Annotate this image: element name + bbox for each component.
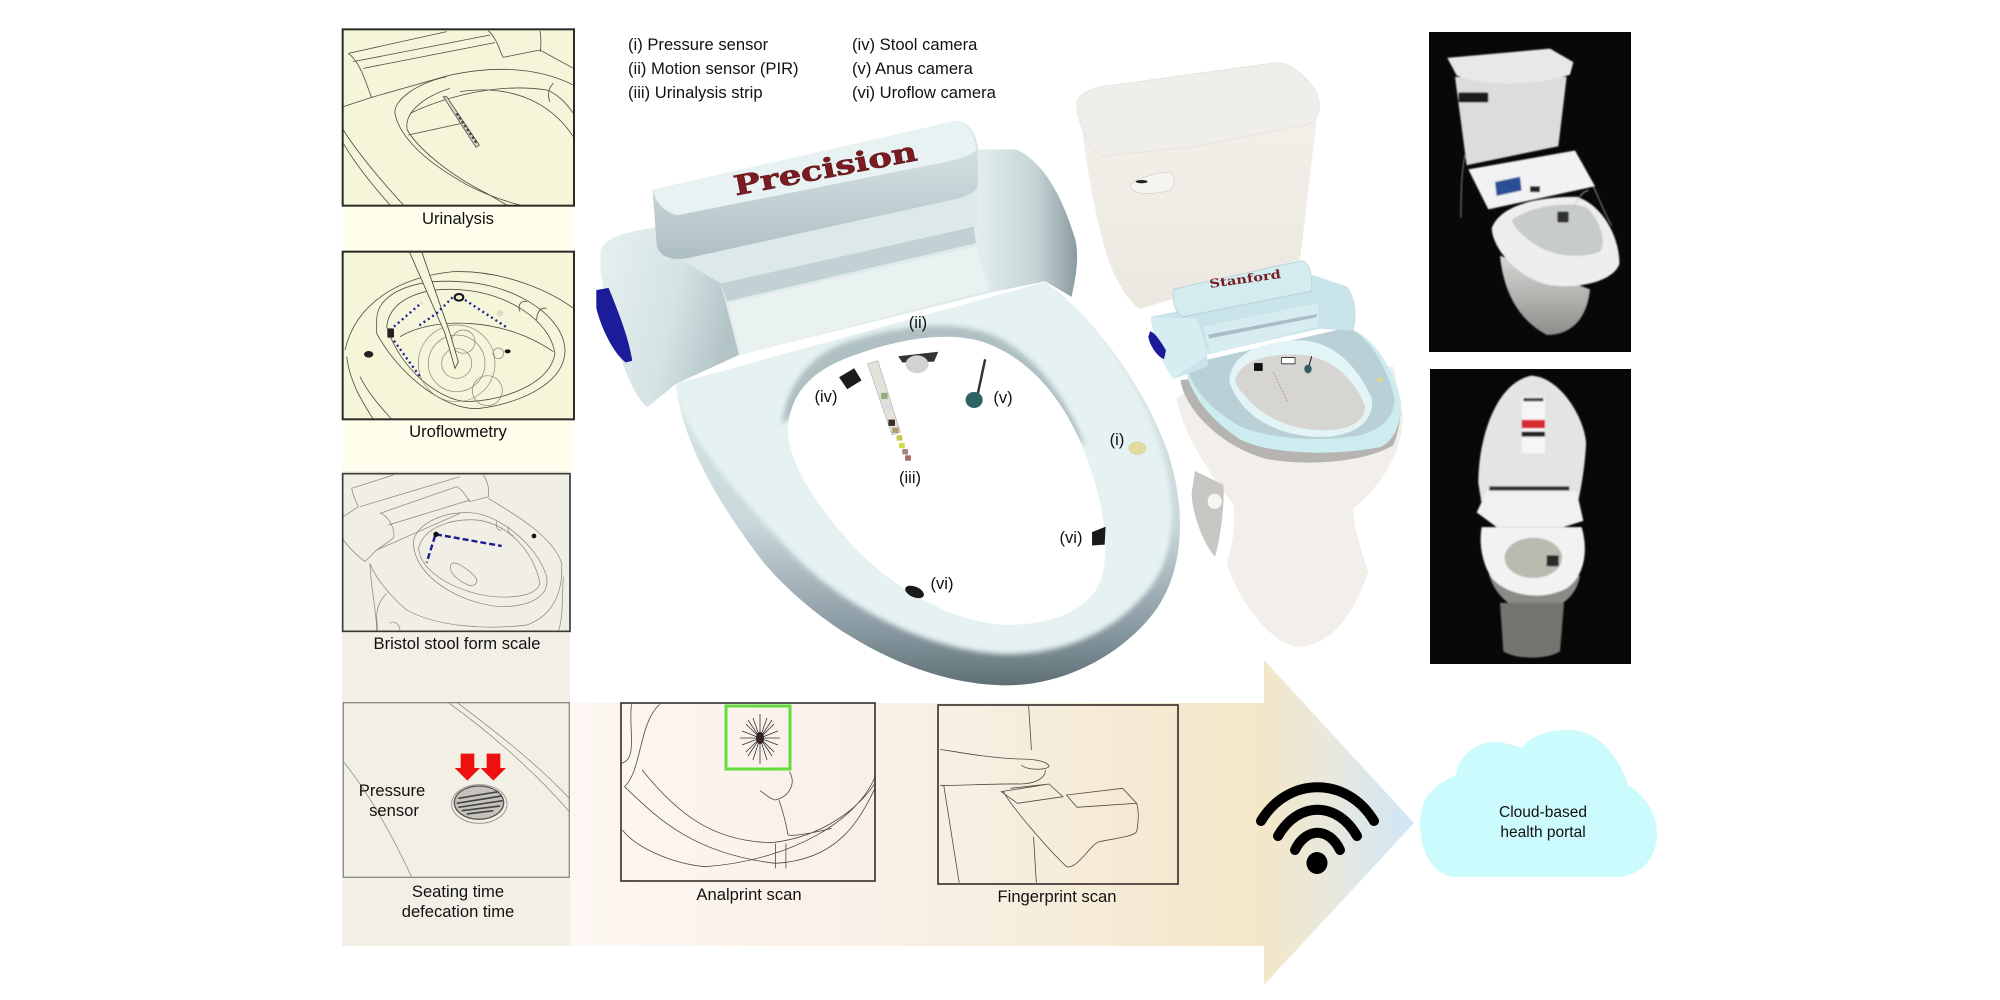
icon: uroflow camera right xyxy=(1092,527,1106,546)
legend left column: (iii) Urinalysis strip xyxy=(628,83,763,102)
pedestal xyxy=(1500,603,1564,658)
arrow to cloud xyxy=(570,660,1414,985)
seat silhouette xyxy=(676,282,1180,685)
flush handle xyxy=(1131,173,1174,194)
bowl rim xyxy=(1492,197,1619,286)
label: analprint: Analprint scan xyxy=(696,885,802,904)
seat top xyxy=(1187,328,1395,439)
bowl skirt xyxy=(1488,571,1580,613)
label: defecation time: defecation time xyxy=(402,902,514,921)
hinge channel xyxy=(721,225,992,355)
bolt cap xyxy=(1207,493,1222,509)
seat xyxy=(1185,327,1401,453)
cloud xyxy=(1420,730,1657,877)
panel: uroflowmetry xyxy=(343,252,574,441)
hinge block xyxy=(1151,275,1356,379)
icon: anus camera stalk xyxy=(978,359,985,394)
seat xyxy=(1481,527,1585,596)
panel frame xyxy=(621,703,875,881)
legend right column: (iv) Stool camera xyxy=(852,35,978,54)
urinalysis strip xyxy=(868,361,911,461)
tank body xyxy=(1082,121,1317,309)
label: ii: (ii) xyxy=(909,313,927,332)
panel: fingerprint scan xyxy=(938,705,1178,906)
hinge front block xyxy=(1151,317,1208,379)
grey seat ring xyxy=(1181,366,1401,463)
electronics xyxy=(1495,177,1522,196)
background panel: beige column xyxy=(342,471,570,946)
chip xyxy=(1530,186,1540,192)
lid xyxy=(1478,376,1586,504)
label: Precision: Precision xyxy=(731,136,920,202)
legend right column xyxy=(852,35,997,102)
board xyxy=(1468,150,1595,209)
label: Stanford: Stanford xyxy=(1209,267,1282,291)
label: bristol stool: Bristol stool form scale xyxy=(374,634,540,653)
lid bar front xyxy=(653,121,978,259)
panel: analprint scan xyxy=(621,703,875,904)
mini motion sensor xyxy=(1282,358,1295,364)
panel: pressure sensor xyxy=(343,703,569,921)
bowl interior xyxy=(1512,204,1603,256)
icon: stool camera xyxy=(839,368,862,389)
sensor mount xyxy=(1458,92,1488,102)
icon: motion sensor xyxy=(898,352,938,362)
label: sensor: sensor xyxy=(369,801,419,820)
label: v: (v) xyxy=(993,388,1013,407)
enlarged seat render xyxy=(596,121,1180,685)
full toilet 3D render xyxy=(1077,63,1403,647)
legend right column: (v) Anus camera xyxy=(852,59,974,78)
seat hole xyxy=(788,337,1105,625)
hole rim xyxy=(1229,340,1372,437)
hole xyxy=(1505,538,1562,578)
label: pressure sensor: Pressure xyxy=(359,781,425,800)
motion sensor ball xyxy=(906,355,928,373)
pedestal xyxy=(1500,256,1590,335)
icon: wifi xyxy=(1261,787,1374,874)
label: vi bottom: (vi) xyxy=(930,574,954,593)
panel: urinalysis xyxy=(343,29,574,228)
right hinge block xyxy=(974,150,1077,297)
label: urinalysis: Urinalysis xyxy=(422,209,494,228)
mini pressure xyxy=(1377,377,1383,382)
mini lens xyxy=(1304,365,1312,373)
label: vi right: (vi) xyxy=(1059,528,1083,547)
label: seating time: Seating time xyxy=(412,882,504,901)
legend left column xyxy=(628,35,799,102)
camera xyxy=(1547,555,1559,566)
tank lid xyxy=(1447,49,1573,84)
blue button xyxy=(1148,331,1166,359)
label: iii: (iii) xyxy=(899,468,921,487)
label: iv: (iv) xyxy=(814,387,838,406)
seat top surface xyxy=(670,279,1172,654)
icon: pressure sensor xyxy=(1129,442,1146,454)
mini strip xyxy=(1273,372,1287,401)
photo: toilet with open lid xyxy=(1430,369,1631,664)
sticker dark xyxy=(1522,432,1545,437)
hinge slot xyxy=(721,227,976,301)
hinge base under bar xyxy=(653,150,978,286)
bolt plate xyxy=(1192,471,1224,557)
icon: anus camera lens xyxy=(966,392,983,408)
star centre xyxy=(756,732,764,744)
hinge channel xyxy=(1203,303,1318,354)
label: uroflowmetry: Uroflowmetry xyxy=(409,422,508,441)
hinge xyxy=(1477,491,1583,527)
blue button xyxy=(596,288,632,362)
sticker band xyxy=(1522,420,1545,428)
label sticker xyxy=(1522,397,1545,454)
sticker top xyxy=(1523,398,1543,401)
mini anus camera xyxy=(1308,356,1312,368)
hinge channel slot xyxy=(1208,314,1317,339)
label: i: (i) xyxy=(1110,430,1124,449)
icon: pressure arrows xyxy=(455,754,506,781)
panel frame xyxy=(938,705,1178,884)
photo: toilet with electronics xyxy=(1429,32,1631,352)
label: health portal: health portal xyxy=(1500,824,1586,841)
slot xyxy=(1489,486,1569,491)
tank lid xyxy=(1077,63,1319,156)
lid bar xyxy=(1173,261,1312,317)
icon: anus print star xyxy=(740,714,780,764)
icon: uroflow camera bottom xyxy=(904,583,925,601)
panel: bristol stool scale xyxy=(343,474,570,653)
background panel: yellow column xyxy=(343,206,574,471)
inner wall shade xyxy=(782,326,1086,446)
label: cloud: Cloud-based xyxy=(1499,804,1587,821)
legend left column: (i) Pressure sensor xyxy=(628,35,769,54)
label: fingerprint: Fingerprint scan xyxy=(998,887,1116,906)
slot floor xyxy=(728,246,989,355)
hole interior xyxy=(1235,354,1365,430)
wire xyxy=(1461,155,1612,225)
mini camera xyxy=(1254,363,1263,371)
left hinge block xyxy=(600,228,739,407)
tank xyxy=(1455,77,1567,165)
lid bar top xyxy=(653,121,977,215)
bowl xyxy=(1177,366,1403,647)
camera xyxy=(1557,212,1569,222)
legend right column: (vi) Uroflow camera xyxy=(852,83,997,102)
legend left column: (ii) Motion sensor (PIR) xyxy=(628,59,799,78)
green frame xyxy=(726,706,790,769)
